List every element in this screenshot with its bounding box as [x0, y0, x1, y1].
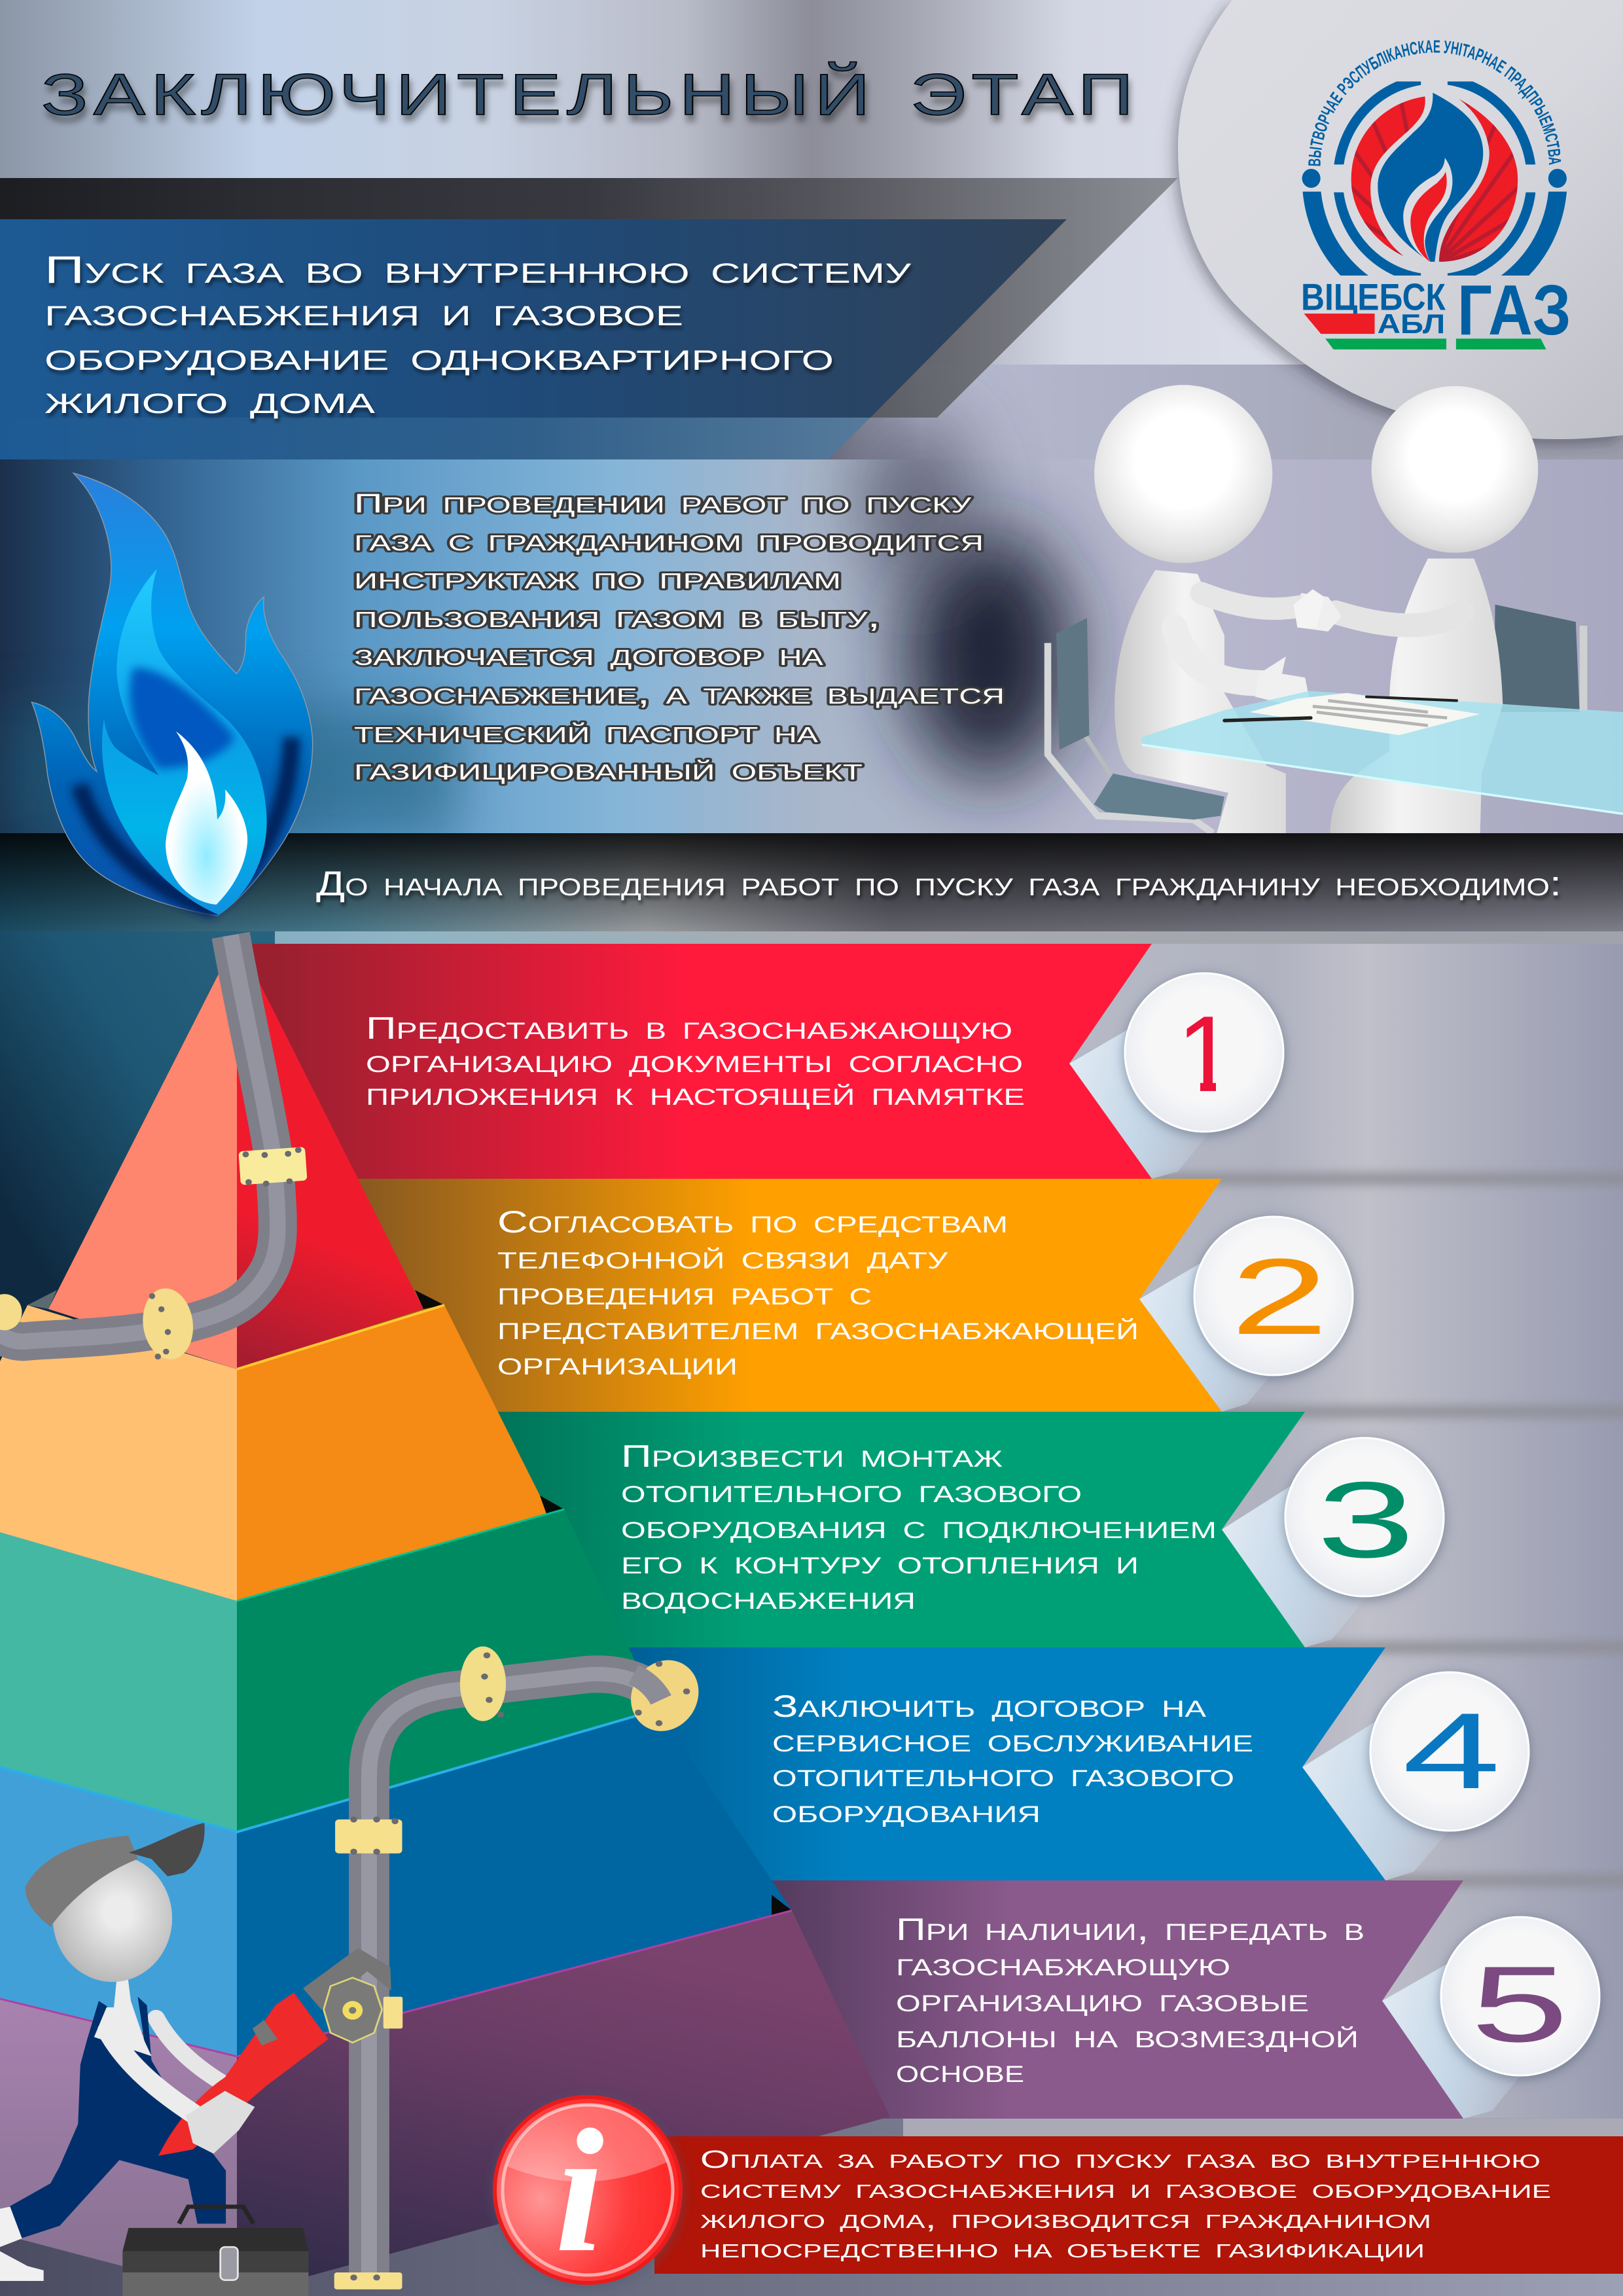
panel: dark intro band — [0, 833, 1623, 931]
step 5 text: газоснабжающую — [896, 1946, 1230, 1982]
pyramid layer 2: orange — [0, 1305, 564, 1601]
body text: газифицированный объект — [354, 751, 863, 786]
subtitle text: газоснабжения и газовое — [45, 289, 683, 334]
step 3 text: оборудования с подключением — [621, 1509, 1217, 1545]
body text: пользования газом в быту, — [354, 599, 880, 634]
step 2 text: телефонной связи дату — [497, 1239, 948, 1276]
flange upper — [238, 1147, 307, 1185]
step 2 text — [497, 1203, 1139, 1382]
number badge 5: 5 — [1471, 1944, 1569, 2064]
overalls — [9, 1997, 226, 2238]
note text: непосредственно на объекте газификации — [700, 2233, 1425, 2263]
pyramid layer 1: red — [27, 938, 444, 1369]
illustration: two figures at a table — [1048, 385, 1623, 833]
worker arms back — [156, 2018, 221, 2081]
icon: info circle: i — [555, 2093, 605, 2289]
step 1 text: приложения к настоящей памятке — [366, 1075, 1025, 1112]
step 5 text — [896, 1910, 1364, 2089]
background: left dark lower blur — [0, 707, 458, 838]
step 4 text: оборудования — [772, 1793, 1041, 1829]
cap — [26, 1823, 205, 1927]
number badge 3: 3 — [1317, 1460, 1415, 1580]
step 3 text: водоснабжения — [621, 1579, 916, 1616]
step 1 text: организацию документы согласно — [366, 1043, 1023, 1079]
background: top area — [0, 0, 1623, 367]
step 5 text: При наличии, передать в — [896, 1910, 1364, 1947]
number badge 2: 2 — [1230, 1236, 1329, 1357]
background: strip below band — [0, 931, 1623, 944]
chair right — [1494, 605, 1584, 712]
step 5 text: основе — [896, 2053, 1024, 2089]
step 5 text: баллоны на возмездной — [896, 2018, 1359, 2054]
step 5 banner — [237, 1880, 1463, 2119]
figure right — [1294, 386, 1538, 833]
chair left — [1048, 618, 1224, 833]
step 1 text: П редоставить в газоснабжающую — [366, 1009, 1012, 1046]
step 2 text: организации — [497, 1345, 738, 1382]
number badge 2 — [1194, 1217, 1353, 1375]
flanges — [334, 1647, 709, 2289]
logo: ГАЗ — [1457, 270, 1571, 350]
number badge 4: 4 — [1402, 1691, 1501, 1811]
step 3 banner — [237, 1412, 1305, 1647]
table with papers and pens — [1142, 691, 1623, 814]
arm front and glove — [108, 2031, 193, 2113]
step 2 banner — [237, 1179, 1222, 1412]
body text: инструктаж по правилам — [354, 560, 841, 595]
note text: жилого дома, производится гражданином — [700, 2204, 1431, 2234]
note text — [700, 2144, 1551, 2263]
title: ЗАКЛЮЧИТЕЛЬНЫЙ ЭТАП — [41, 62, 1139, 127]
toolbox — [122, 2207, 308, 2296]
background: dark blur blob — [906, 530, 1070, 779]
logo: ВЫТВОРЧАЕ РЭСПУБЛІКАНСКАЕ УНІТАРНАЕ ПРАДПРЫЕМСТВА — [1308, 41, 1561, 166]
logo — [1301, 41, 1571, 350]
pyramid layer 3: green — [0, 1509, 658, 1832]
callout: payment note — [654, 2136, 1623, 2274]
background: light strip under step 5 — [903, 2119, 1623, 2136]
step 2 text: проведения работ с — [497, 1275, 872, 1312]
body text: газоснабжение, а также выдается — [354, 675, 1005, 710]
number badge 1 — [1125, 973, 1283, 1132]
subtitle text: оборудование одноквартирного — [45, 334, 834, 379]
background: floor — [0, 2117, 1623, 2296]
step 3 text: отопительного газового — [621, 1473, 1082, 1509]
note text: О плата за работу по пуску газа во внутреннюю — [700, 2144, 1541, 2174]
logo: ВІЦЕБСК — [1301, 277, 1446, 319]
flange middle — [139, 1285, 198, 1363]
step 4 text: сервисное обслуживание — [772, 1722, 1253, 1759]
number badge 1: 1 — [1177, 994, 1236, 1114]
head — [53, 1855, 172, 1982]
icon: info circle — [495, 2093, 681, 2289]
number badge 4 — [1370, 1672, 1529, 1831]
neck and shirt — [94, 1975, 151, 2056]
step 2 text: С огласовать по средствам — [497, 1203, 1008, 1240]
flange left — [0, 1294, 22, 1330]
pyramid — [0, 938, 890, 2296]
step 4 text: Заключить договор на — [772, 1687, 1207, 1724]
body text — [354, 484, 1005, 786]
pipe: upper — [0, 935, 307, 1363]
icon: blue flame — [31, 473, 313, 916]
worker with wrench and toolbox — [0, 1823, 391, 2296]
figure left — [1094, 385, 1324, 833]
background: right of steps — [982, 944, 1623, 2142]
pyramid layer 5: purple — [0, 1910, 890, 2296]
number badge 5 — [1441, 1917, 1599, 2075]
background: teal area behind pyramid — [0, 931, 275, 1376]
step 3 text: его к контуру отопления и — [621, 1544, 1139, 1581]
step 1 banner — [237, 944, 1152, 1179]
step 3 text: П роизвести монтаж — [621, 1437, 1003, 1474]
step 3 text — [621, 1437, 1217, 1616]
body text: технический паспорт на — [354, 714, 818, 749]
foot — [0, 2207, 44, 2281]
background: dark blur column — [864, 412, 969, 583]
wrench — [158, 1948, 391, 2156]
step 4 text: отопительного газового — [772, 1757, 1234, 1793]
background: separators — [1139, 1174, 1623, 1886]
pyramid layer 4: blue — [0, 1710, 792, 2056]
step 2 text: представителем газоснабжающей — [497, 1310, 1139, 1346]
wedges beside steps — [1069, 1008, 1548, 2119]
body text: П ри проведении работ по пуску — [354, 484, 972, 519]
note text: систему газоснабжения и газовое оборудование — [700, 2174, 1551, 2204]
panel: logo disc — [1178, 0, 1623, 439]
subtitle text — [45, 247, 912, 422]
background: middle area — [0, 459, 1623, 836]
subtitle text: жилого дома — [45, 377, 375, 422]
background: lavender area at right — [825, 365, 1623, 463]
panel: dark diagonal band — [0, 178, 1178, 418]
body text: газа с гражданином проводится — [354, 522, 984, 557]
step 1 text — [366, 1009, 1025, 1112]
text: intro line: До начала проведения работ по пуску газа гражданину необходимо: — [316, 865, 1561, 903]
logo: АБЛ — [1378, 308, 1445, 339]
step 5 text: организацию газовые — [896, 1982, 1309, 2018]
pipe: lower — [334, 1647, 709, 2289]
panel: subtitle blue panel — [0, 219, 1067, 459]
step 4 text — [772, 1687, 1253, 1829]
step 4 banner — [237, 1647, 1385, 1880]
body text: заключается договор на — [354, 637, 823, 672]
number badge 3 — [1285, 1438, 1444, 1596]
subtitle text: П уск газа во внутреннюю систему — [45, 247, 912, 292]
